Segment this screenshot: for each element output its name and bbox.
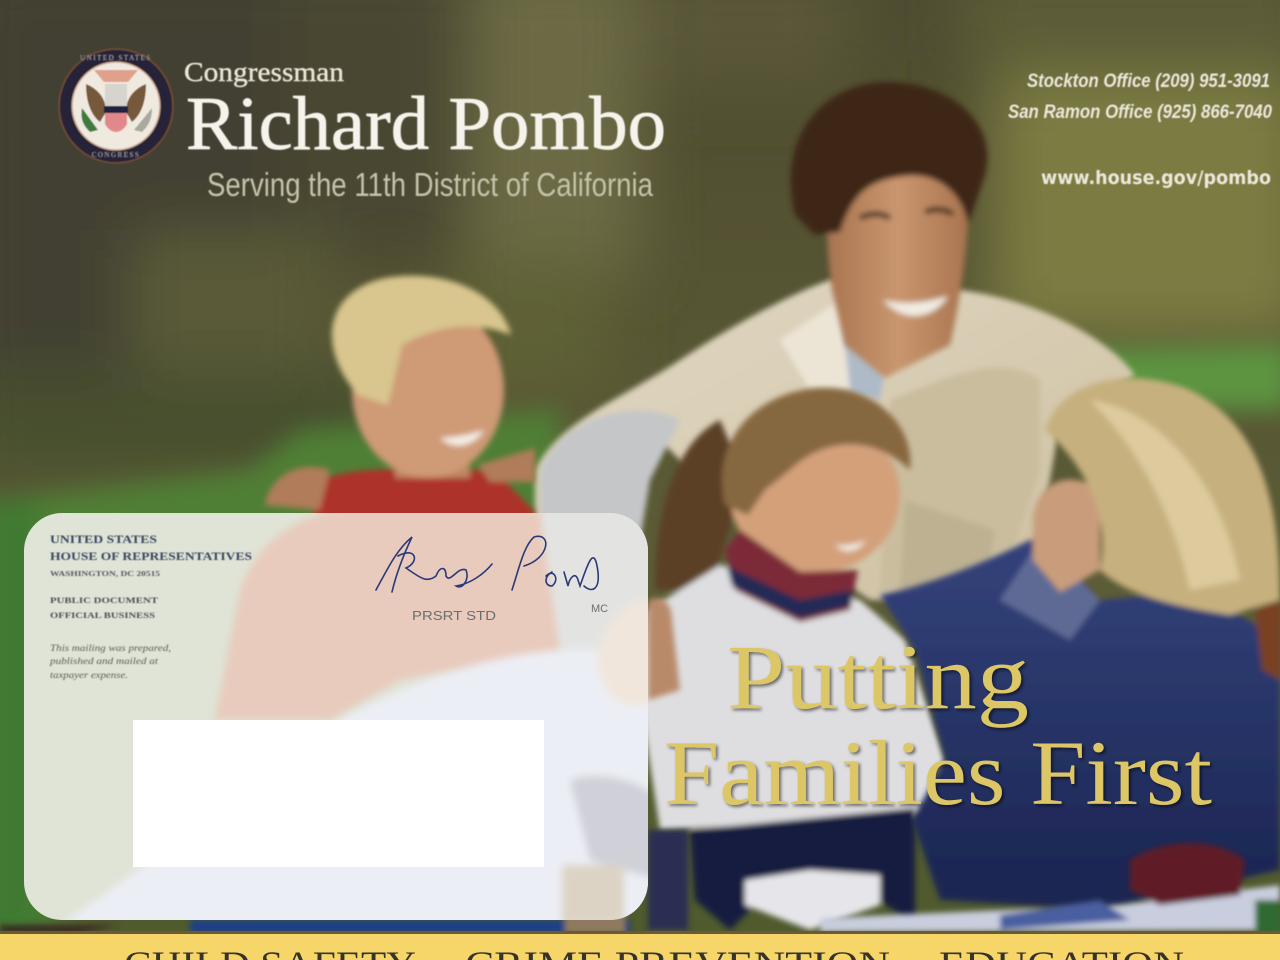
panel: mailing window (24, 510, 660, 930)
return address: UNITED STATES (50, 534, 157, 546)
title: Putting Families First: Families First (664, 722, 1212, 824)
mother (880, 378, 1280, 910)
header: congressman name: Serving the 11th District of California (207, 166, 654, 203)
ghosted photo inside panel (60, 510, 660, 930)
father: head (791, 82, 987, 378)
footer band (0, 931, 1280, 960)
return address (49, 534, 252, 680)
blanket and grapes (820, 843, 1280, 932)
boy: head and shirt (265, 276, 535, 530)
return address: OFFICIAL BUSINESS (50, 610, 155, 620)
return address: WASHINGTON, DC 20515 (50, 569, 160, 578)
return address: published and mailed at (49, 656, 159, 666)
title: Putting Families First (664, 626, 1212, 824)
father: shirt (535, 280, 1135, 600)
postal marks: PRSRT STD (412, 608, 496, 623)
seal: CONGRESS (92, 151, 140, 159)
panel: mailing window: MC (591, 603, 608, 615)
title: Putting Families First: Putting (727, 626, 1029, 728)
signature (376, 536, 598, 592)
seal (59, 49, 173, 163)
address label (133, 720, 544, 867)
seal: UNITED STATES (80, 54, 152, 62)
return address: This mailing was prepared, (50, 643, 171, 653)
return address: PUBLIC DOCUMENT (50, 595, 158, 605)
contact details (1008, 71, 1272, 189)
arm and strip below panel (0, 598, 688, 933)
return address: HOUSE OF REPRESENTATIVES (50, 551, 252, 563)
header: congressman name (184, 57, 666, 203)
header: congressman name: Congressman (184, 57, 345, 87)
header: congressman name: Richard Pombo (186, 82, 666, 166)
girl (640, 388, 945, 930)
return address: taxpayer expense. (50, 670, 128, 680)
